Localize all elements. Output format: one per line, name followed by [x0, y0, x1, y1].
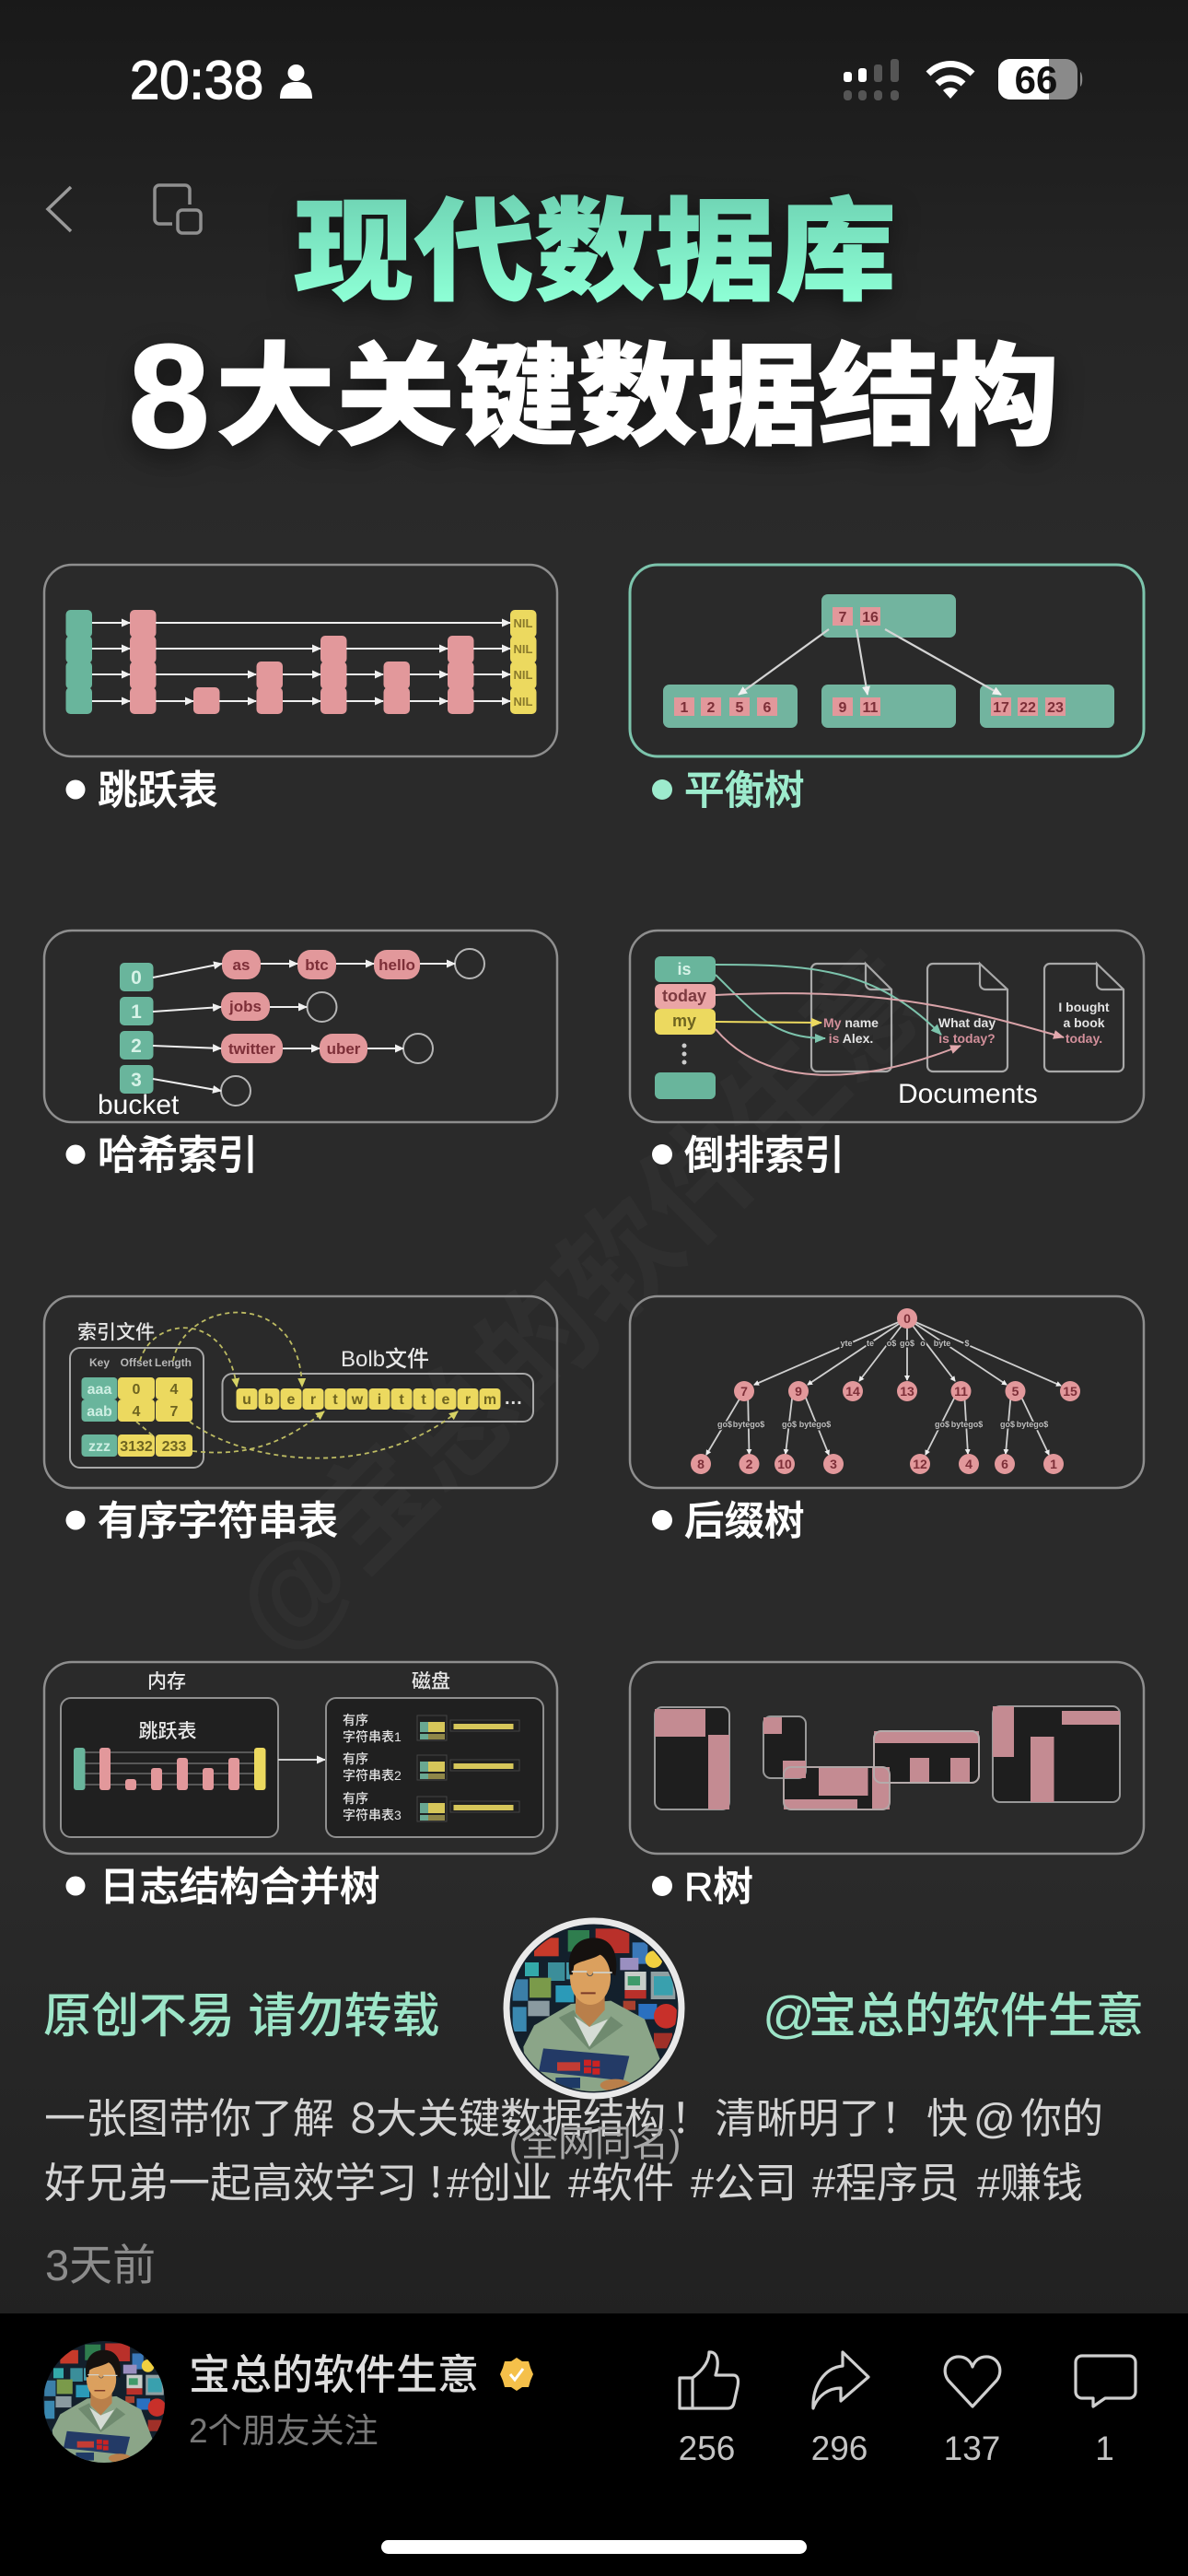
- title line 2: 大关键数据结构: [215, 334, 1060, 460]
- label: R-tree: [652, 1866, 753, 1910]
- caption line 2: ！: [425, 2160, 467, 2207]
- tree circles: 15: [1063, 1384, 1077, 1399]
- terms: today: [662, 987, 706, 1005]
- chain nodes: hello: [379, 956, 415, 974]
- tree arrows: [739, 629, 1001, 695]
- index file box: 0: [133, 1382, 141, 1398]
- tree keys: 22: [1019, 700, 1036, 716]
- title line 1: 现代数据库: [294, 190, 897, 315]
- blob file box: b: [264, 1392, 274, 1408]
- label: LSM tree: 日志结构合并树: [99, 1866, 379, 1910]
- edge labels: bytego$: [1017, 1420, 1048, 1429]
- skip list arrows: [92, 623, 510, 701]
- terms: [655, 956, 716, 1099]
- clock: 20:38: [130, 51, 263, 111]
- memory heading: 内存: [147, 1671, 186, 1692]
- edge labels: go$: [717, 1420, 732, 1429]
- edge labels: go$: [900, 1339, 914, 1348]
- tree keys: 6: [763, 700, 772, 716]
- icon: person: [280, 64, 312, 99]
- blob file box: ...: [505, 1388, 523, 1409]
- tree keys: 1: [681, 700, 689, 716]
- label: inverted index: 倒排索引: [684, 1134, 844, 1178]
- NIL labels: [514, 616, 533, 708]
- dashed pointers: [136, 1313, 458, 1458]
- chain nodes: uber: [327, 1040, 361, 1058]
- label: suffix tree: 后缀树: [684, 1500, 805, 1544]
- icon: back chevron: [48, 187, 71, 231]
- footer handle right: 宝总的软件生意: [809, 1990, 1144, 2043]
- index file box: Key: [89, 1356, 110, 1369]
- document text: is today?: [938, 1031, 996, 1046]
- panel: suffix tree: [630, 1296, 1144, 1488]
- watermark: @宝总的软件生意: [206, 930, 953, 1676]
- bucket caption: bucket: [98, 1090, 180, 1120]
- edge labels: te: [867, 1339, 874, 1348]
- buckets: 0: [131, 967, 142, 989]
- panel: inverted index: [630, 931, 1144, 1122]
- document text: What day: [938, 1015, 996, 1030]
- caption line 2: #软件: [568, 2160, 674, 2207]
- edge labels: o: [920, 1339, 926, 1348]
- tree keys: 9: [839, 700, 847, 716]
- edge labels: bytego$: [799, 1420, 831, 1429]
- edge labels: go$: [782, 1420, 797, 1429]
- panel: balanced tree: [630, 565, 1144, 756]
- bucket arrows: [153, 964, 455, 1091]
- skip list columns: [66, 610, 536, 714]
- panel: hash index: [44, 931, 557, 1122]
- document text: [823, 1000, 1110, 1046]
- footer notice left: 原创不易 请勿转载: [43, 1990, 439, 2043]
- index file box: zzz: [88, 1439, 111, 1455]
- index arrows: [716, 965, 1064, 1075]
- icon: devices: [155, 185, 201, 233]
- index file heading: 索引文件: [77, 1322, 155, 1343]
- arrow: memory to disk: [278, 1759, 325, 1761]
- tree keys: 5: [736, 700, 744, 716]
- tree circles: 0: [903, 1311, 911, 1326]
- timestamp: 3天前: [45, 2241, 156, 2289]
- counts: [679, 2430, 1114, 2467]
- tree circles: 1: [1050, 1457, 1057, 1471]
- caption line 2: #程序员: [812, 2160, 960, 2207]
- edge labels: yte: [840, 1339, 853, 1348]
- tree circles: [691, 1308, 1080, 1474]
- mini sstables: [417, 1715, 519, 1821]
- tree keys: 11: [863, 700, 879, 716]
- document text: is Alex.: [829, 1031, 873, 1046]
- NIL labels: NIL: [514, 642, 533, 656]
- tree circles: 12: [913, 1457, 927, 1471]
- tree circles: 11: [954, 1384, 968, 1399]
- terms: my: [672, 1012, 696, 1030]
- bottom bar: [0, 2313, 1188, 2576]
- blob file box: r: [465, 1392, 471, 1408]
- terms: is: [677, 960, 692, 978]
- index file box: Offset: [121, 1356, 152, 1369]
- tree keys: 2: [707, 700, 716, 716]
- blob file box: [223, 1374, 533, 1422]
- caption line 2: #公司: [691, 2160, 797, 2207]
- panel: LSM tree: [44, 1662, 557, 1854]
- avatar large: [497, 1912, 691, 2105]
- icon: comment: [1076, 2356, 1136, 2406]
- caption line 1: 快: [926, 2095, 968, 2142]
- counts: 296: [811, 2430, 868, 2467]
- icon: share: [813, 2352, 868, 2408]
- chain nodes: as: [233, 956, 250, 974]
- disk box: [326, 1698, 543, 1837]
- caption line 1: 清晰明了！: [715, 2095, 922, 2142]
- blob file box: w: [351, 1392, 364, 1408]
- counts: 256: [679, 2430, 735, 2467]
- index file box: aaa: [87, 1382, 111, 1398]
- tree circles: 10: [777, 1457, 792, 1471]
- disk box: 字符串表3: [343, 1808, 402, 1822]
- author name: 宝总的软件生意: [189, 2351, 479, 2398]
- index file box: 3132: [120, 1439, 153, 1455]
- tree circles: 2: [746, 1457, 753, 1471]
- chain nodes: btc: [305, 956, 329, 974]
- document text: My name: [823, 1015, 879, 1030]
- NIL labels: NIL: [514, 695, 533, 708]
- documents: [811, 964, 1124, 1071]
- panel: SSTable: [44, 1296, 557, 1488]
- label: balanced tree: 平衡树: [684, 769, 805, 814]
- tree keys: [674, 607, 1066, 716]
- blob file box: t: [332, 1392, 338, 1408]
- blob file box: t: [421, 1392, 426, 1408]
- disk box: 有序: [343, 1713, 368, 1727]
- tree keys: 23: [1047, 700, 1064, 716]
- tree circles: 5: [1012, 1384, 1019, 1399]
- tree circles: 9: [795, 1384, 802, 1399]
- tree nodes: [663, 594, 1114, 728]
- index file box: 233: [162, 1439, 186, 1455]
- NIL labels: NIL: [514, 668, 533, 682]
- counts: 1: [1095, 2430, 1114, 2467]
- icon: wifi: [928, 64, 973, 99]
- blob file heading: Bolb文件: [341, 1347, 429, 1372]
- tree circles: 3: [830, 1457, 837, 1471]
- tree circles: 6: [1001, 1457, 1008, 1471]
- title: [128, 190, 1060, 478]
- index file box: [70, 1348, 204, 1468]
- buckets: 1: [131, 1001, 142, 1023]
- tree circles: 13: [900, 1384, 914, 1399]
- caption line 1: 大关键数据结构: [376, 2095, 666, 2142]
- blob file box: i: [378, 1392, 381, 1408]
- buckets: 2: [131, 1036, 142, 1057]
- mini skip list: [74, 1748, 265, 1790]
- icon: like: [680, 2352, 738, 2408]
- caption line 2: 好兄弟一起高效学习: [44, 2160, 417, 2207]
- index file box: 4: [133, 1404, 141, 1420]
- status bar: [130, 51, 1082, 111]
- index file box: Length: [155, 1356, 192, 1369]
- chain nodes: twitter: [228, 1040, 275, 1058]
- blob file box: r: [310, 1392, 316, 1408]
- index file box: 7: [170, 1404, 179, 1420]
- tree edges: [706, 1318, 1061, 1455]
- tree keys: 7: [839, 610, 847, 626]
- tree keys: 17: [993, 700, 1009, 716]
- disk box: 有序: [343, 1791, 368, 1806]
- label: R-tree: R树: [684, 1866, 753, 1910]
- NIL labels: NIL: [514, 616, 533, 630]
- edge labels: [717, 1339, 1048, 1429]
- blob file box: t: [399, 1392, 404, 1408]
- edge labels: go$: [935, 1420, 949, 1429]
- caption line 2: #赚钱: [977, 2160, 1083, 2207]
- tree keys: 16: [862, 610, 879, 626]
- caption line 2: #创业: [447, 2160, 553, 2207]
- icon: heart: [945, 2357, 1000, 2406]
- icon: verified badge: [500, 2358, 533, 2391]
- icon: battery: [998, 58, 1082, 101]
- friends count: 2个朋友关注: [189, 2412, 379, 2450]
- index file box: aab: [87, 1404, 112, 1420]
- chain nodes: jobs: [228, 998, 262, 1015]
- edge labels: go$: [1000, 1420, 1015, 1429]
- blob file box: u: [242, 1392, 251, 1408]
- home indicator: [381, 2540, 807, 2554]
- buckets: 3: [131, 1070, 142, 1091]
- title line 2: [128, 313, 1060, 478]
- same name note: (全网同名): [509, 2124, 681, 2164]
- buckets: [120, 963, 153, 1094]
- document text: today.: [1066, 1031, 1102, 1046]
- edge labels: bytego$: [733, 1420, 764, 1429]
- edge labels: $: [964, 1339, 970, 1348]
- chain nodes: [221, 949, 484, 1106]
- index file box: 4: [170, 1382, 179, 1398]
- caption line 1: ！: [670, 2095, 712, 2142]
- blob file box: e: [442, 1392, 450, 1408]
- label: SSTable: 有序字符串表: [98, 1500, 338, 1544]
- label: skip list: 跳跃表: [98, 769, 217, 814]
- tree circles: 8: [697, 1457, 705, 1471]
- disk box: 字符串表1: [343, 1729, 402, 1744]
- memory box: [61, 1698, 278, 1837]
- counts: 137: [944, 2430, 1000, 2467]
- memory box: 跳跃表: [138, 1721, 197, 1742]
- blob file box: m: [483, 1392, 496, 1408]
- tree circles: 7: [740, 1384, 748, 1399]
- tree circles: 14: [845, 1384, 860, 1399]
- label: hash index: 哈希索引: [98, 1134, 258, 1178]
- title line 2: 8: [128, 313, 210, 478]
- document text: a book: [1063, 1015, 1105, 1030]
- disk heading: 磁盘: [412, 1671, 450, 1692]
- documents caption: Documents: [898, 1079, 1038, 1109]
- avatar small: [33, 2331, 175, 2473]
- region boxes: [655, 1706, 1120, 1809]
- caption line 1: 一张图带你了解: [44, 2095, 334, 2142]
- edge labels: byte: [934, 1339, 950, 1348]
- panel: R-tree: [630, 1662, 1144, 1854]
- disk box: 有序: [343, 1751, 368, 1766]
- caption line 1: @: [973, 2095, 1016, 2142]
- tree circles: 4: [965, 1457, 973, 1471]
- footer handle right: @: [763, 1985, 815, 2043]
- panel: skip list: [44, 565, 557, 756]
- document text: I bought: [1058, 1000, 1110, 1014]
- edge labels: bytego$: [951, 1420, 983, 1429]
- caption line 1: ８: [343, 2095, 384, 2142]
- blob file box: e: [287, 1392, 296, 1408]
- disk box: 字符串表2: [343, 1768, 402, 1783]
- edge labels: o$: [887, 1339, 896, 1348]
- icon: signal: [844, 59, 899, 100]
- caption line 1: 你的: [1020, 2095, 1103, 2142]
- icon: battery: 66: [1015, 58, 1057, 101]
